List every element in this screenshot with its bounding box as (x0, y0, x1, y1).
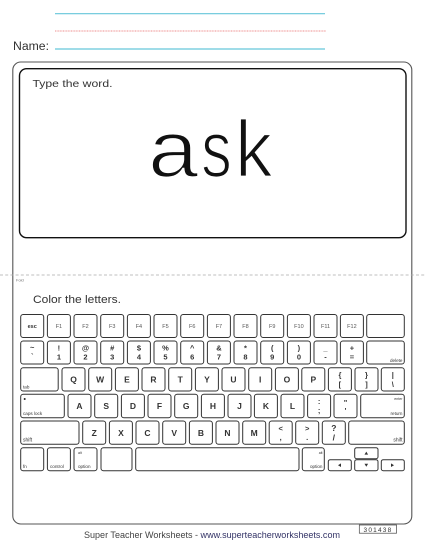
key: right bracket: } (365, 370, 368, 380)
key: D: D (130, 401, 136, 411)
key: F1: F1 (56, 324, 62, 330)
key: F11 (314, 314, 337, 338)
key: 5: 5 (163, 352, 168, 362)
name label: Name: (13, 41, 49, 53)
key: S (95, 394, 118, 418)
key: fn: fn (23, 464, 27, 469)
key: I: I (259, 374, 261, 384)
key: 0: 0 (297, 352, 301, 362)
key: right arrow (381, 460, 404, 471)
key: 4 (127, 341, 150, 364)
key: tilde: ~ (30, 343, 35, 352)
key: V: V (171, 428, 177, 438)
row: number keys (21, 341, 404, 364)
key: M: M (251, 428, 258, 438)
key: 7: & (216, 344, 222, 352)
key: 3: 3 (110, 352, 114, 362)
key: 6: 6 (190, 352, 194, 362)
row: home keys (21, 394, 404, 418)
key: 1: 1 (57, 352, 61, 362)
key: F7: F7 (216, 324, 222, 330)
key: equals: = (350, 352, 355, 362)
key: F5: F5 (162, 324, 169, 330)
key: right option (302, 448, 324, 471)
key: 5 (154, 341, 177, 364)
key: slash (322, 421, 345, 444)
key: quote: ' (345, 406, 347, 415)
key: O: O (284, 374, 291, 384)
key: N: N (224, 428, 231, 438)
key: minus (314, 341, 337, 364)
key: return: enter (394, 397, 403, 401)
key: command (101, 448, 132, 471)
key: semicolon: ; (318, 406, 320, 415)
key: R (142, 368, 165, 391)
key: F: F (157, 401, 162, 411)
panel: type the word (20, 69, 406, 238)
key: F2 (74, 314, 97, 338)
key: F8 (234, 314, 257, 338)
key: right shift: shift (393, 438, 403, 444)
key: A: A (76, 401, 83, 411)
key: A (68, 394, 91, 418)
key: W (89, 368, 112, 391)
key: F7 (207, 314, 230, 338)
key: F6: F6 (189, 324, 195, 330)
worksheet code: 301438 (364, 527, 392, 534)
key: 0 (287, 341, 310, 364)
key: right shift (349, 421, 404, 444)
key: F6 (181, 314, 204, 338)
key: 9: ( (271, 344, 274, 352)
key: B: B (198, 428, 204, 438)
key: 2: @ (82, 344, 89, 352)
key: F10: F10 (294, 324, 304, 330)
key: F11: F11 (321, 324, 330, 330)
key: F4: F4 (136, 324, 142, 330)
key: R: R (150, 374, 157, 384)
key: space bar (136, 448, 299, 471)
key: Q: Q (70, 374, 77, 384)
key: G (175, 394, 198, 418)
key: right bracket (355, 368, 378, 391)
key: 4: 4 (137, 352, 142, 362)
key: esc (21, 314, 44, 338)
outer panel (13, 62, 412, 524)
keyboard (21, 314, 404, 471)
key: return (361, 394, 404, 418)
key: F9 (261, 314, 284, 338)
key: D (121, 394, 144, 418)
key: semicolon (308, 394, 331, 418)
key: W: W (96, 374, 105, 384)
key: 6: ^ (190, 344, 195, 352)
key: F3: F3 (109, 324, 115, 330)
key: F8: F8 (242, 324, 249, 330)
key: 3 (101, 341, 124, 364)
key: C: C (144, 428, 151, 438)
key: tab: tab (23, 384, 30, 390)
key: period (296, 421, 319, 444)
footer: Super Teacher Worksheets - www.superteacherworksheets.com (84, 530, 340, 540)
key: Y: Y (204, 374, 210, 384)
instruction: color the letters: Color the letters. (33, 294, 121, 306)
key: tilde: ` (31, 352, 34, 361)
key: E: E (124, 374, 130, 384)
key: P (302, 368, 325, 391)
key: backslash: | (392, 370, 394, 380)
key: T: T (178, 374, 184, 384)
key: down arrow (355, 460, 378, 471)
key: G: G (183, 401, 190, 411)
key: I (249, 368, 272, 391)
key: left bracket: [ (339, 380, 342, 389)
key: 0: ) (298, 344, 301, 352)
key: Z: Z (92, 428, 97, 438)
key: control (47, 448, 70, 471)
key: M (243, 421, 266, 444)
key: Z (83, 421, 106, 444)
name writing lines (55, 14, 326, 49)
key: backslash (381, 368, 404, 391)
key: C (136, 421, 159, 444)
key: 4: $ (137, 344, 142, 352)
row: QWERTY (21, 368, 404, 391)
key: tab (21, 368, 58, 391)
key: up arrow (355, 448, 378, 459)
row: shift keys (21, 421, 404, 444)
word: ask: k (235, 105, 273, 194)
key: 6 (181, 341, 204, 364)
key: slash: ? (331, 423, 336, 433)
key: F12: F12 (347, 324, 357, 330)
key: left bracket (328, 368, 351, 391)
key: left arrow (328, 460, 351, 471)
key: left option: option (78, 464, 91, 469)
key: minus: _ (322, 344, 328, 352)
key: U (222, 368, 245, 391)
key: F2: F2 (82, 324, 89, 330)
key: blank (367, 314, 404, 338)
key: F10 (287, 314, 310, 338)
key: O (275, 368, 298, 391)
key: left shift: shift (23, 438, 33, 444)
key: right option: alt (319, 451, 323, 455)
key: period: > (305, 424, 310, 433)
key: 2: 2 (83, 352, 88, 362)
key: 1: ! (58, 344, 60, 352)
key: 3: # (110, 344, 115, 352)
key: delete: delete (390, 358, 403, 363)
key: 8 (234, 341, 257, 364)
key: H (201, 394, 224, 418)
key: 2 (74, 341, 97, 364)
key: minus: - (324, 352, 327, 362)
row: function keys (21, 314, 404, 338)
key: right bracket: ] (365, 380, 368, 389)
key: left bracket: { (338, 370, 341, 380)
key: esc: esc (28, 324, 37, 330)
word: ask (148, 105, 273, 195)
key: left shift (21, 421, 79, 444)
key: H: H (210, 401, 216, 411)
key: comma (269, 421, 292, 444)
word: ask: s (201, 106, 232, 195)
key: F5 (154, 314, 177, 338)
key: control: control (50, 464, 64, 469)
key: 9: 9 (270, 352, 274, 362)
key: left option (74, 448, 97, 471)
key: X (109, 421, 132, 444)
key: K (254, 394, 277, 418)
key: S: S (103, 401, 109, 411)
key: right option: option (310, 464, 323, 469)
key: V (163, 421, 186, 444)
key: 7 (207, 341, 230, 364)
key: fn (21, 448, 44, 471)
key: L: L (290, 401, 295, 411)
key: 1 (47, 341, 70, 364)
key: 8: * (244, 344, 247, 352)
key: F1 (47, 314, 70, 338)
key: 9 (261, 341, 284, 364)
key: L (281, 394, 304, 418)
key: P: P (310, 374, 316, 384)
key: 7: 7 (217, 352, 221, 362)
key: F (148, 394, 171, 418)
key: Q (62, 368, 85, 391)
key: comma: , (280, 433, 282, 442)
key: K: K (263, 401, 270, 411)
key: caps lock (21, 394, 64, 418)
key: E (115, 368, 138, 391)
key: return: return (390, 411, 403, 416)
key: delete (367, 341, 404, 364)
key: B (189, 421, 212, 444)
key: F4 (127, 314, 150, 338)
key: comma: < (279, 424, 284, 433)
key: J (228, 394, 251, 418)
instruction: type the word: Type the word. (32, 78, 112, 90)
key: N (216, 421, 239, 444)
key: quote: " (344, 398, 348, 407)
key: T (169, 368, 192, 391)
key: equals (340, 341, 363, 364)
row: bottom keys (21, 448, 404, 471)
key: 8: 8 (243, 352, 248, 362)
key: 5: % (162, 344, 169, 352)
key: caps lock: caps lock (23, 411, 43, 416)
key: F12 (340, 314, 363, 338)
key: quote (334, 394, 357, 418)
word: ask: a (148, 105, 199, 194)
key: semicolon: : (318, 397, 320, 406)
key: F9: F9 (269, 324, 275, 330)
worksheet code (359, 525, 396, 534)
key: left option: alt (78, 451, 82, 455)
key: equals: + (350, 344, 355, 352)
key: Y (195, 368, 218, 391)
fold label: Fold (16, 278, 24, 282)
key: F3 (101, 314, 124, 338)
key: X: X (118, 428, 124, 438)
key: J: J (237, 401, 242, 411)
key: U: U (230, 374, 237, 384)
key: period: . (306, 433, 308, 442)
key: backslash: \ (392, 380, 395, 389)
key: slash: / (333, 432, 336, 442)
key: tilde (21, 341, 44, 364)
